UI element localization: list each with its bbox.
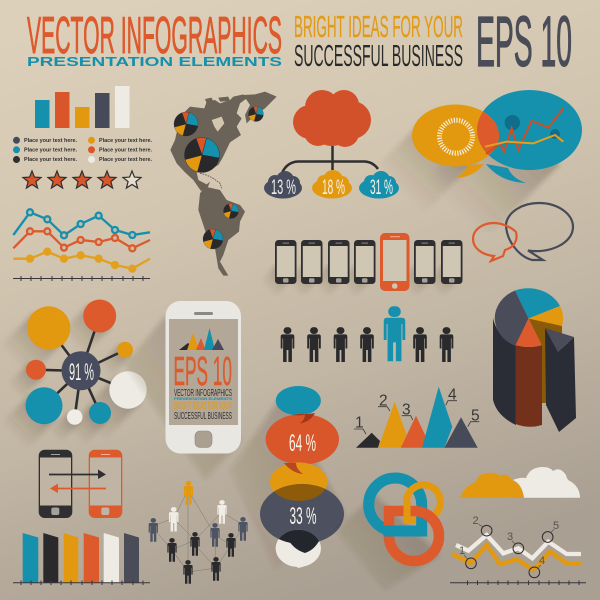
pie: North America west xyxy=(174,112,198,136)
amber bubble xyxy=(455,164,484,178)
cloud 31 %: 31 % xyxy=(370,176,393,199)
red oval 64 % xyxy=(266,413,339,464)
data exchange phones xyxy=(39,450,122,518)
numbered mountain chart xyxy=(354,386,480,448)
pie: South America xyxy=(203,229,223,249)
cloud 18 %: 18 % xyxy=(322,176,345,199)
line chart: three series xyxy=(13,209,150,281)
white oval xyxy=(276,530,321,568)
legend: Place your text here. xyxy=(99,157,153,163)
big red cloud xyxy=(293,90,371,147)
legend: Place your text here. xyxy=(24,138,78,144)
slate oval 33 %: 33 % xyxy=(290,503,316,530)
pie: Brazil xyxy=(223,203,239,219)
bar chart: top left xyxy=(35,86,130,128)
star rating xyxy=(23,171,141,188)
legend: Place your text here. xyxy=(99,148,153,154)
white smartphone xyxy=(125,301,241,480)
main title: PRESENTATION ELEMENTS xyxy=(27,54,282,69)
smartphone row xyxy=(268,233,462,291)
arrow left xyxy=(50,484,106,493)
speech bubbles: filled xyxy=(400,90,582,210)
chain links xyxy=(335,478,440,590)
speech bubbles: outline xyxy=(473,203,573,261)
tagline xyxy=(294,9,463,73)
white smartphone: SUCCESSFUL BUSINESS xyxy=(174,411,232,422)
screen text: PRESENTATION ELEMENTS xyxy=(174,397,233,401)
numbered line chart: 1 xyxy=(459,545,465,557)
numbered mountain chart: 4 xyxy=(448,386,457,404)
numbered line chart: 3 xyxy=(507,531,513,543)
mini mountain chart xyxy=(179,328,224,350)
hub 91 %: 91 % xyxy=(69,359,94,386)
dark phone xyxy=(39,450,72,518)
amber and white clouds xyxy=(460,467,580,498)
numbered line chart xyxy=(450,515,586,585)
teal oval xyxy=(276,386,321,415)
numbered mountain chart: 1 xyxy=(355,414,364,432)
pie: Greenland xyxy=(248,106,264,122)
3D pie cylinder xyxy=(493,288,576,432)
red oval 64 %: 64 % xyxy=(289,430,316,457)
row of people xyxy=(281,306,453,362)
numbered mountain chart: 5 xyxy=(471,408,480,424)
numbered line chart: 5 xyxy=(553,520,559,532)
arrow right xyxy=(49,470,106,479)
text: EPS 10 xyxy=(174,348,232,394)
screen text xyxy=(174,348,233,422)
world map with pies xyxy=(170,92,277,276)
cloud 13 %: 13 % xyxy=(271,176,296,199)
sun ring xyxy=(440,120,472,153)
orange phone xyxy=(380,233,410,291)
cut wedge xyxy=(545,328,576,432)
white smartphone: BRIGHT IDEAS FOR YOUR xyxy=(174,401,232,412)
main title xyxy=(27,7,282,69)
slate oval 33 % xyxy=(260,484,344,542)
legend xyxy=(13,137,153,163)
bubble chart xyxy=(485,108,563,154)
teal bubble xyxy=(486,164,526,183)
red link xyxy=(389,511,439,561)
stacked speech ovals xyxy=(230,386,345,570)
legend: Place your text here. xyxy=(99,138,153,144)
numbered line chart: 4 xyxy=(539,555,545,567)
people network xyxy=(149,481,248,584)
numbered line chart: 2 xyxy=(472,515,479,527)
numbered mountain chart: 2 xyxy=(379,392,388,410)
cloud tree diagram xyxy=(264,90,399,199)
network circles with 91 % xyxy=(14,300,147,437)
amber oval xyxy=(270,462,327,501)
orange phone xyxy=(89,450,122,518)
legend: Place your text here. xyxy=(24,157,78,163)
white smartphone: VECTOR INFOGRAPHICS xyxy=(174,387,232,399)
teal link xyxy=(369,478,422,531)
pie top xyxy=(495,288,563,347)
slanted bar chart xyxy=(13,533,150,585)
pie: North America large xyxy=(184,137,220,173)
legend: Place your text here. xyxy=(24,148,78,154)
amber link xyxy=(406,485,440,516)
numbered mountain chart: 3 xyxy=(402,402,411,418)
